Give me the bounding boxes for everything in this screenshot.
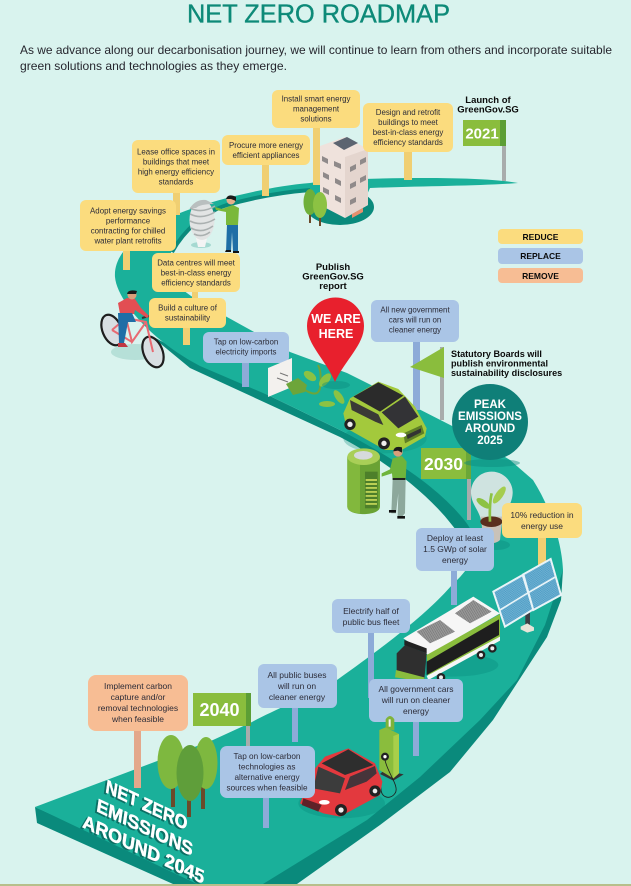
box: all public buses: will run on — [277, 681, 316, 691]
intro text — [20, 43, 612, 73]
box: data centres — [152, 253, 240, 292]
pole: electrify bus fleet — [368, 633, 374, 698]
box: deploy solar: energy — [442, 555, 469, 565]
label: launch of GreenGov.SG: GreenGov.SG — [457, 104, 519, 116]
box: all new government cars: cleaner energy — [389, 326, 441, 334]
flag: 2021 — [463, 120, 506, 181]
flag: 2030: 2030 — [424, 454, 463, 474]
label: publish GreenGov.SG report: Publish — [316, 262, 350, 273]
flag: 2021: 2021 — [465, 126, 499, 142]
box: design and retrofit — [363, 103, 453, 152]
box: alternative energy: alternative energy — [234, 773, 300, 782]
label: net zero emissions around 2045: NET ZERO — [104, 775, 189, 834]
box: carbon capture: capture and/or — [111, 692, 166, 702]
label: launch of GreenGov.SG: Launch of — [465, 95, 512, 106]
box: alternative energy: sources when feasible — [226, 784, 308, 792]
icon: we are here pin: WE ARE — [311, 312, 361, 326]
box: alternative energy: Tap on low-carbon — [234, 752, 301, 761]
badge: peak emissions around 2025 — [452, 384, 528, 467]
label: publish GreenGov.SG report: report — [319, 281, 348, 292]
flag: statutory boards — [410, 347, 444, 420]
box: deploy solar: Deploy at least — [427, 533, 484, 543]
box: design and retrofit: buildings to meet — [378, 118, 439, 127]
pole: deploy solar — [451, 571, 457, 605]
box: build a culture: sustainability — [165, 314, 210, 322]
pole: procure appliances — [262, 165, 269, 196]
pole: build a culture — [183, 328, 190, 345]
box: design and retrofit: best-in-class energy — [373, 128, 443, 137]
icon: small trees by building — [304, 189, 327, 226]
icon: green electric car — [343, 382, 427, 453]
badge: peak emissions around 2025: EMISSIONS — [458, 411, 522, 423]
box: build a culture: Build a culture of — [158, 304, 218, 312]
box: lease office spaces: standards — [159, 178, 193, 186]
box: install smart energy — [272, 90, 360, 128]
badge: peak emissions around 2025: AROUND — [465, 423, 515, 435]
box: adopt energy savings: performance — [106, 216, 151, 226]
legend: REPLACE — [520, 251, 561, 261]
label: publish GreenGov.SG report — [302, 262, 364, 292]
box: lease office spaces: high energy efficiency — [138, 168, 214, 176]
icon: energy saving bulb — [190, 200, 215, 248]
box: build a culture — [149, 298, 226, 328]
box: carbon capture — [88, 675, 188, 731]
pole: install smart energy — [313, 128, 320, 185]
icon: solar panels — [493, 559, 561, 633]
flag: 2040 — [193, 693, 251, 753]
legend: REDUCE — [523, 232, 559, 242]
box: electrify bus fleet: public bus fleet — [343, 617, 400, 627]
pole: all public buses — [292, 708, 298, 742]
legend: REMOVE — [522, 271, 559, 281]
box: adopt energy savings: contracting for chilled — [91, 226, 165, 236]
pole: adopt contracting — [123, 251, 130, 270]
box: all government cars: will run on cleaner — [381, 695, 450, 705]
pole: carbon capture — [134, 731, 141, 788]
box: carbon capture: removal technologies — [98, 703, 178, 713]
box: all public buses — [258, 664, 337, 708]
icon: man at battery — [382, 447, 407, 519]
label: launch of GreenGov.SG — [457, 95, 519, 116]
icon: office building — [320, 137, 368, 218]
label: statutory boards disclosures — [451, 349, 562, 378]
box: all government cars: All government cars — [378, 684, 454, 694]
pole: all new government cars — [413, 342, 420, 410]
box: all new government cars — [371, 300, 459, 342]
box: electrify bus fleet: Electrify half of — [343, 606, 400, 616]
pole: low-carbon imports — [242, 363, 249, 387]
icon: red electric car — [298, 748, 385, 818]
box: design and retrofit: efficiency standards — [373, 138, 443, 147]
icon: plug and plant — [268, 358, 346, 407]
badge: peak emissions around 2025: PEAK — [474, 399, 507, 411]
box: procure appliances — [222, 135, 310, 165]
flag: 2040: 2040 — [199, 700, 240, 720]
box: adopt energy savings: water plant retrofits — [93, 236, 162, 246]
box: all new government cars: cars will run on — [389, 316, 441, 324]
pole: alternative energy — [263, 798, 269, 828]
flag: 2030 — [421, 448, 471, 520]
intro text: green solutions and technologies as they emerge. — [20, 59, 287, 73]
box: lease office spaces: Lease office spaces in — [137, 148, 215, 156]
pole: 10% reduction — [538, 538, 546, 565]
box: low-carbon electricity imports: electricity imports — [216, 348, 277, 356]
label: statutory boards disclosures: Statutory Boards will — [451, 349, 542, 359]
box: design and retrofit: Design and retrofit — [376, 108, 441, 117]
box: electrify bus fleet — [332, 599, 410, 633]
box: alternative energy — [220, 746, 315, 798]
box: 10% reduction: energy use — [521, 521, 563, 531]
icon: cyclist — [97, 290, 168, 370]
legend — [498, 229, 583, 283]
box: carbon capture: when feasible — [111, 714, 164, 724]
badge: peak emissions around 2025: 2025 — [477, 435, 503, 447]
label: publish GreenGov.SG report: GreenGov.SG — [302, 272, 364, 282]
pole: data centres — [192, 292, 198, 299]
box: procure appliances: Procure more energy — [229, 141, 303, 150]
box: lease office spaces: buildings that meet — [143, 158, 210, 166]
box: all public buses: All public buses — [267, 670, 327, 680]
box: deploy solar — [416, 528, 494, 571]
box: data centres: efficiency standards — [161, 278, 231, 288]
label: statutory boards disclosures: publish environmental — [451, 358, 548, 368]
icon: plant in bulb — [471, 472, 513, 550]
icon: we are here pin — [307, 298, 364, 389]
box: install smart energy: management — [293, 104, 340, 114]
box: all public buses: cleaner energy — [269, 692, 326, 702]
box: data centres: Data centres will meet — [157, 258, 236, 268]
box: low-carbon electricity imports — [203, 332, 289, 363]
icon: battery — [347, 448, 380, 514]
box: carbon capture: Implement carbon — [104, 681, 172, 691]
label: net zero emissions around 2045: AROUND 2045 — [81, 810, 206, 886]
icon: electric bus — [395, 597, 500, 682]
pole: lease office — [173, 193, 180, 215]
label: net zero emissions around 2045 — [81, 775, 206, 886]
intro text: As we advance along our decarbonisation journey, we will continue to learn from others and incorporate suitable — [20, 43, 612, 57]
box: install smart energy: Install smart energy — [282, 94, 350, 104]
box: all new government cars: All new government — [380, 306, 450, 314]
box: all government cars — [369, 679, 463, 722]
icon: trees — [158, 735, 218, 817]
box: deploy solar: 1.5 GWp of solar — [423, 544, 487, 554]
box: lease office spaces — [132, 140, 220, 193]
box: low-carbon electricity imports: Tap on low-carbon — [214, 338, 278, 346]
road — [35, 178, 563, 884]
box: install smart energy: solutions — [300, 114, 332, 124]
icon: charging station — [379, 716, 404, 797]
box: alternative energy: technologies as — [239, 762, 295, 772]
box: adopt energy savings: Adopt energy savings — [90, 206, 166, 216]
pole: all government cars — [413, 722, 419, 756]
box: adopt energy savings — [80, 200, 176, 251]
box: 10% reduction — [502, 503, 582, 538]
box: data centres: best-in-class energy — [161, 268, 231, 278]
icon: man with bulb — [215, 195, 239, 253]
box: all government cars: energy — [403, 706, 430, 716]
icon: we are here pin: HERE — [319, 327, 353, 341]
box: 10% reduction: 10% reduction in — [510, 510, 574, 520]
label: statutory boards disclosures: sustainability disclosures — [451, 368, 562, 378]
pole: design and retrofit — [404, 152, 412, 180]
label: net zero emissions around 2045: EMISSIONS — [95, 794, 194, 860]
box: procure appliances: efficient appliances — [233, 151, 300, 160]
